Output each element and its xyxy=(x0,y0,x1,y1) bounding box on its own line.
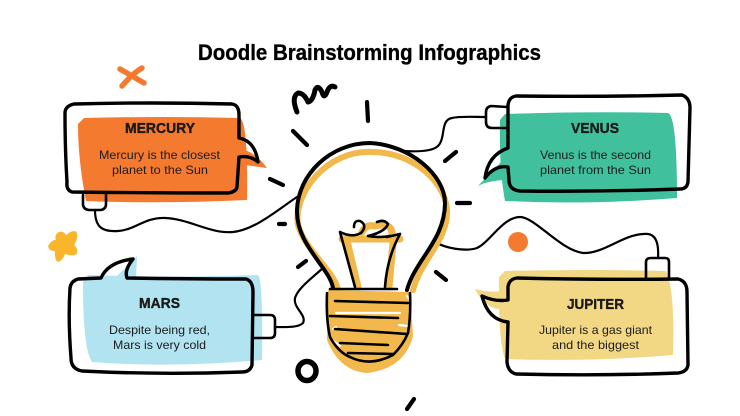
panel: mars xyxy=(69,256,323,373)
jupiter outline xyxy=(482,278,688,375)
venus wire xyxy=(403,117,485,151)
mercury outline xyxy=(65,103,258,193)
title: Doodle Brainstorming Infographics xyxy=(198,40,541,65)
mars outline xyxy=(69,259,253,373)
jupiter text: Jupiter is a gas giant xyxy=(539,323,653,337)
bulb filament outline xyxy=(340,221,400,287)
bulb base gaps xyxy=(332,296,410,346)
icon: black ring xyxy=(298,362,316,380)
bulb base outline xyxy=(327,289,410,362)
icon: light rays xyxy=(270,102,470,409)
bulb filament yellow xyxy=(342,225,400,287)
panel: jupiter xyxy=(435,217,688,375)
venus heading: VENUS xyxy=(571,120,619,137)
mercury text: planet to the Sun xyxy=(112,163,208,177)
mercury text xyxy=(99,148,221,177)
mars heading: MARS xyxy=(139,295,180,312)
icon: yellow star xyxy=(50,233,76,260)
icon: orange cross xyxy=(120,68,144,86)
venus text xyxy=(540,148,651,177)
panel: mercury xyxy=(65,103,297,232)
mars text xyxy=(109,323,210,352)
mercury text: Mercury is the closest xyxy=(99,148,221,162)
mars plug xyxy=(255,315,275,338)
mars text: Despite being red, xyxy=(109,323,210,337)
icon: light bulb xyxy=(297,143,447,373)
bulb glass outline xyxy=(297,143,445,290)
jupiter wire xyxy=(435,217,658,258)
venus text: Venus is the second xyxy=(540,148,651,162)
venus text: planet from the Sun xyxy=(540,163,651,177)
mars wire xyxy=(275,268,323,327)
jupiter heading: JUPITER xyxy=(567,296,624,313)
mercury wire xyxy=(95,197,297,232)
panel: venus xyxy=(403,95,690,202)
jupiter text: and the biggest xyxy=(552,338,640,352)
icon: orange dot xyxy=(508,232,528,252)
bulb base yellow xyxy=(327,290,413,373)
mars text: Mars is very cold xyxy=(113,338,206,352)
venus outline xyxy=(485,95,690,191)
mercury plug xyxy=(83,195,106,210)
venus plug xyxy=(486,106,507,128)
jupiter text xyxy=(539,323,653,352)
jupiter plug xyxy=(646,258,669,277)
mercury heading: MERCURY xyxy=(125,120,195,137)
icon: squiggle xyxy=(294,86,335,112)
bulb glass yellow stroke xyxy=(297,152,447,290)
